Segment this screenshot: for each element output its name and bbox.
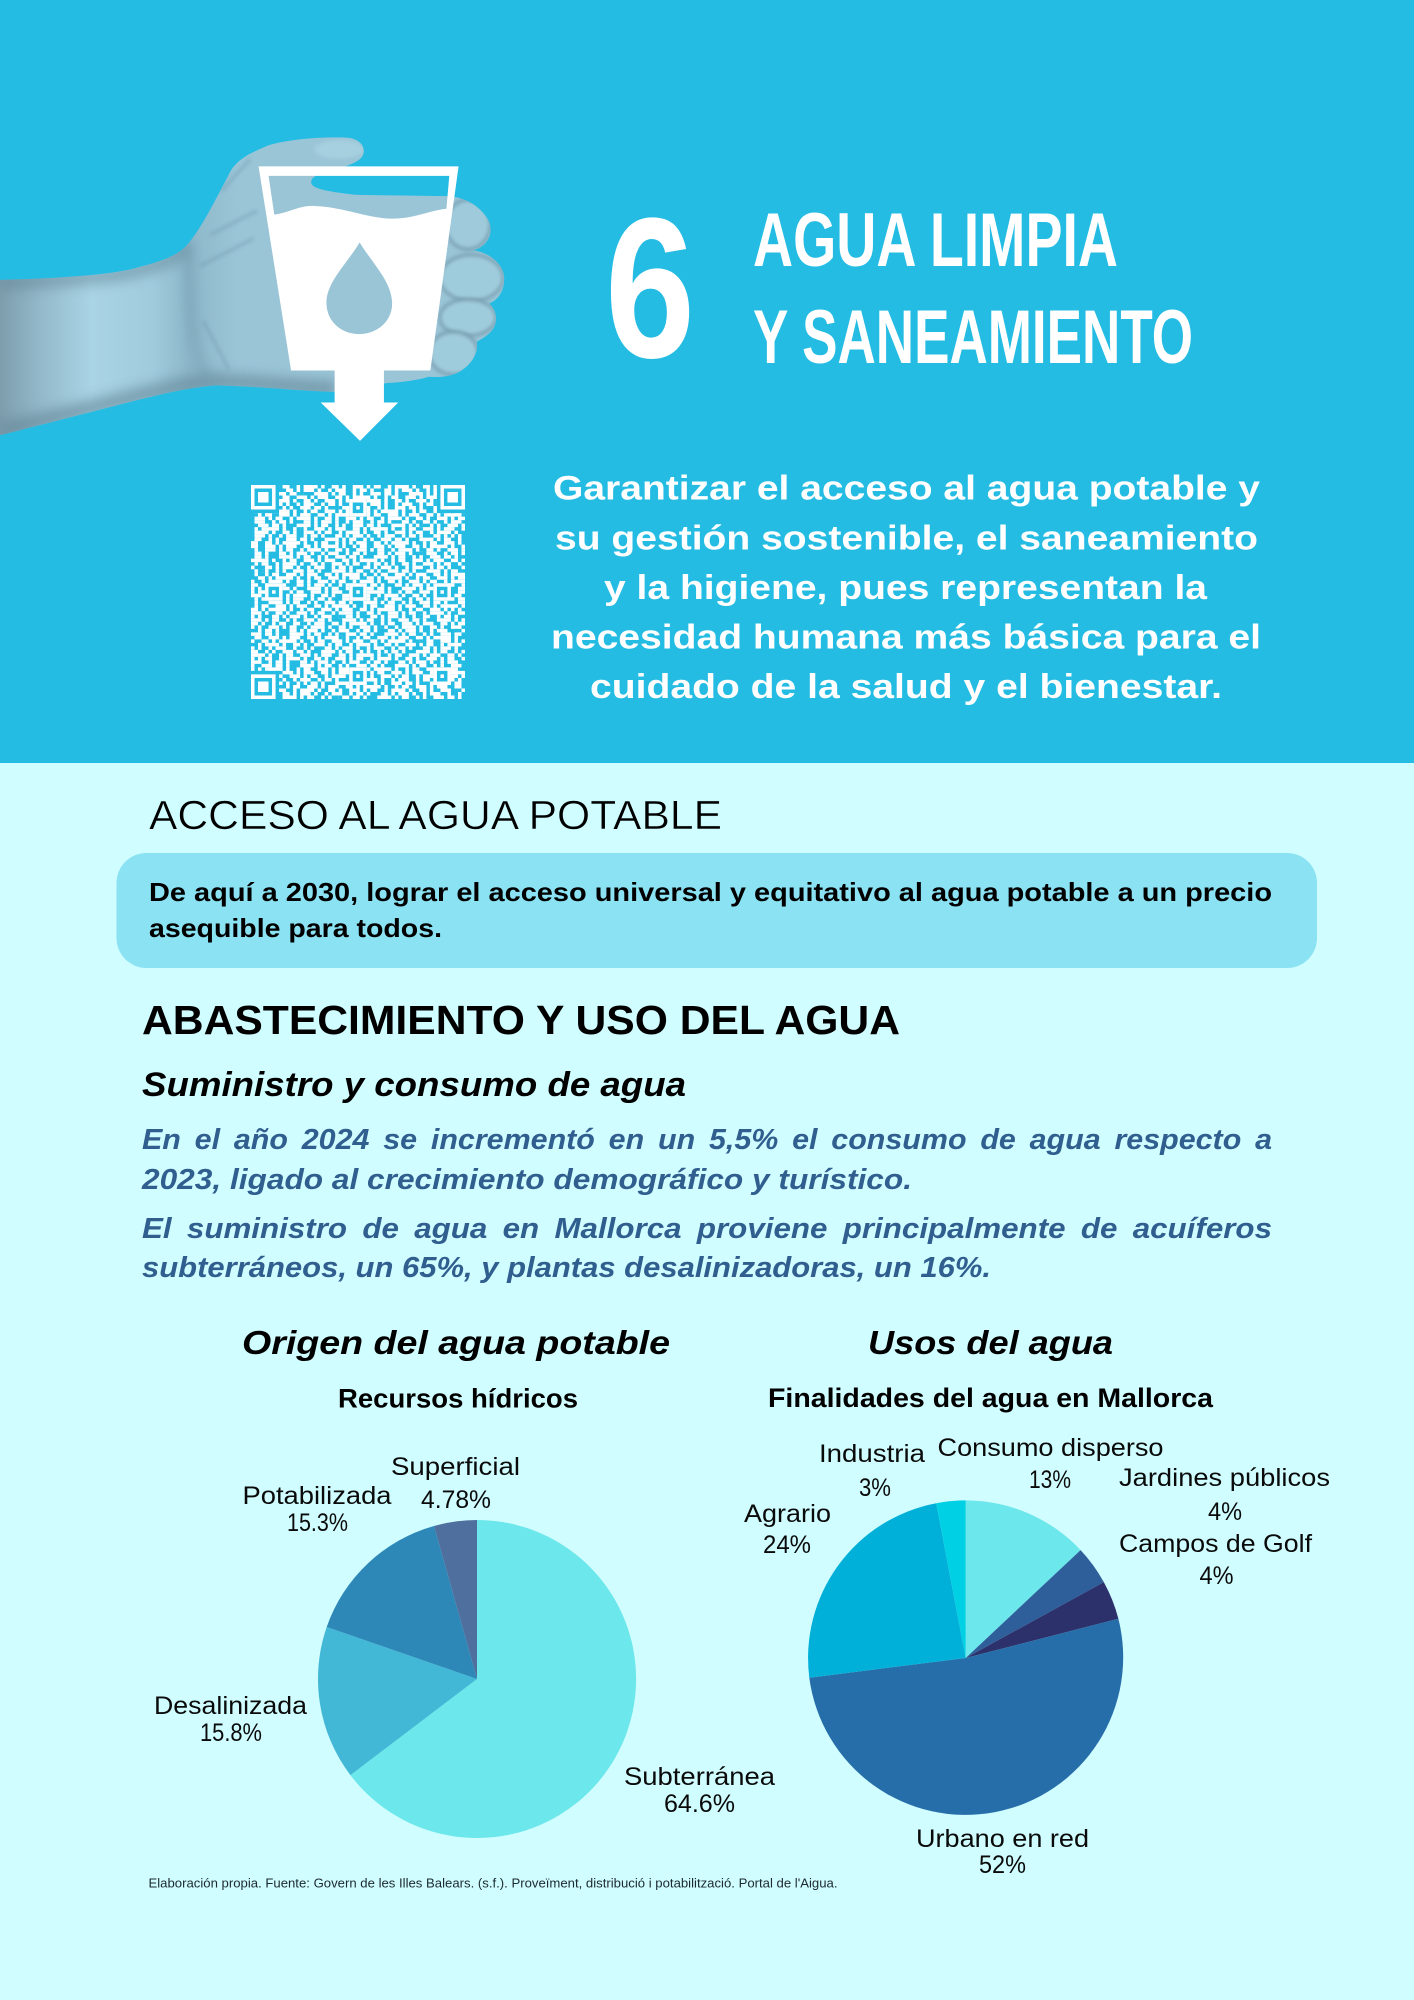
- icon: glass with water drop and arrow: [259, 166, 459, 441]
- photo: hand holding glass: [0, 124, 514, 448]
- QR finder and alignment patterns: [251, 485, 465, 699]
- goal description: Garantizar el acceso al agua potable y: [553, 470, 1260, 508]
- goal title: AGUA LIMPIA: [753, 198, 1118, 283]
- pie labels: recursos hidricos: 15.3%: [287, 1509, 348, 1537]
- pie chart: finalidades: [808, 1500, 1123, 1815]
- text block: consumption: 2023, ligado al crecimiento demográfico y turístico.: [141, 1164, 912, 1196]
- pie labels: finalidades: Agrario: [744, 1500, 831, 1528]
- QR code: [251, 485, 465, 699]
- chart subtitle: finalidades: Finalidades del agua en Mallorca: [768, 1383, 1213, 1413]
- callout: target 2030: asequible para todos.: [149, 913, 442, 943]
- text block: supply: El suministro de agua en Mallorca proviene principalmente de acuíferos: [142, 1213, 1272, 1245]
- pie labels: finalidades: Consumo disperso: [938, 1434, 1164, 1462]
- goal description: y la higiene, pues representan la: [604, 569, 1208, 607]
- QR finder clearing: [251, 485, 465, 699]
- pie labels: recursos hidricos: 64.6%: [664, 1790, 735, 1818]
- callout: target 2030: De aquí a 2030, lograr el acceso universal y equitativo al agua potable a un precio: [149, 877, 1272, 907]
- goal description: cuidado de la salud y el bienestar.: [590, 668, 1222, 706]
- pie labels: recursos hidricos: 15.8%: [200, 1719, 262, 1747]
- pie labels: recursos hidricos: Subterránea: [624, 1763, 775, 1791]
- panel: origen del agua potable: [154, 1324, 775, 1838]
- pie labels: recursos hidricos: Potabilizada: [242, 1482, 392, 1510]
- pie labels: finalidades: Urbano en red: [916, 1825, 1089, 1853]
- pie labels: finalidades: 3%: [859, 1474, 891, 1502]
- panel: blue header: [0, 0, 1414, 763]
- pie labels: recursos hidricos: 4.78%: [421, 1486, 491, 1514]
- text block: consumption: [141, 1124, 1272, 1196]
- goal description: su gestión sostenible, el saneamiento: [555, 520, 1258, 558]
- pie labels: finalidades: Campos de Golf: [1119, 1530, 1312, 1558]
- pie labels: finalidades: Industria: [819, 1440, 925, 1468]
- pie labels: recursos hidricos: [154, 1453, 775, 1818]
- pie labels: finalidades: Jardines públicos: [1119, 1464, 1330, 1492]
- text block: supply: subterráneos, un 65%, y plantas desalinizadoras, un 16%.: [142, 1252, 991, 1284]
- pie labels: finalidades: 4%: [1200, 1562, 1234, 1590]
- pie labels: finalidades: 24%: [763, 1531, 811, 1559]
- goal number 6: 6: [605, 177, 695, 400]
- pie labels: finalidades: 52%: [979, 1851, 1026, 1879]
- goal description: [551, 470, 1261, 706]
- goal title: Y SANEAMIENTO: [753, 295, 1193, 380]
- subheading: suministro y consumo: Suministro y consumo de agua: [142, 1066, 686, 1104]
- chart subtitle: recursos hidricos: Recursos hídricos: [338, 1384, 578, 1414]
- pie labels: finalidades: 13%: [1029, 1466, 1071, 1494]
- heading: acceso al agua potable: ACCESO AL AGUA POTABLE: [149, 792, 722, 838]
- heading: abastecimiento y uso del agua: ABASTECIMIENTO Y USO DEL AGUA: [142, 997, 900, 1043]
- pie labels: finalidades: 4%: [1208, 1498, 1242, 1526]
- text block: supply: [142, 1213, 1272, 1284]
- source note: Elaboración propia. Fuente: Govern de les Illes Balears. (s.f.). Proveïment, distribució i potabilització. Portal de l'Aigua.: [148, 1876, 837, 1890]
- callout: target 2030: [116, 853, 1317, 968]
- pie labels: finalidades: [744, 1434, 1330, 1879]
- pie chart: recursos hidricos: [318, 1520, 636, 1838]
- pie labels: recursos hidricos: Superficial: [391, 1453, 520, 1481]
- goal title: [753, 198, 1193, 380]
- chart title: usos: Usos del agua: [868, 1324, 1113, 1361]
- pie labels: recursos hidricos: Desalinizada: [154, 1692, 307, 1720]
- text block: consumption: En el año 2024 se incrementó en un 5,5% el consumo de agua respecto a: [142, 1124, 1272, 1156]
- goal description: necesidad humana más básica para el: [551, 618, 1261, 656]
- chart title: origen: Origen del agua potable: [242, 1324, 670, 1361]
- panel: usos del agua: [744, 1324, 1330, 1879]
